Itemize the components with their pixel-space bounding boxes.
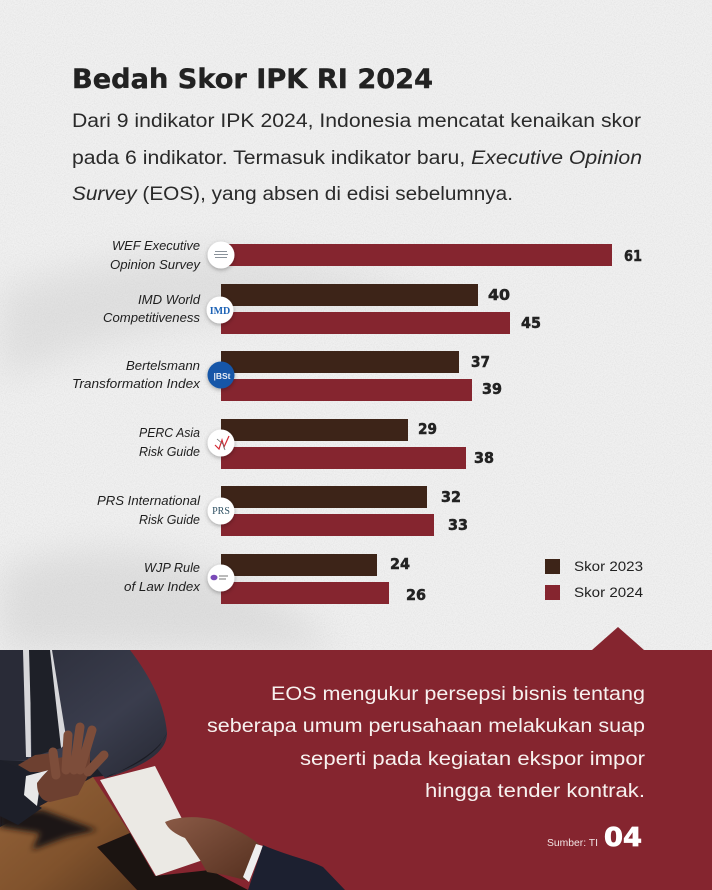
envelope (100, 766, 203, 876)
row: Bertelsmann Transformation Index: |BSt (213, 371, 231, 381)
row: PERC Asia Risk Guide: PERC Asia (139, 426, 200, 440)
legend: Skor 2024 (574, 584, 643, 600)
clasped hand (18, 753, 52, 772)
page number: 04 (604, 823, 642, 853)
callout text (207, 684, 646, 802)
row: Bertelsmann Transformation Index: Transformation Index (72, 377, 201, 391)
row: PRS International Risk Guide: PRS International (97, 494, 201, 508)
paper background (0, 0, 710, 650)
callout text: seperti pada kegiatan ekspor impor (300, 749, 646, 770)
row: WJP Rule of Law Index (124, 554, 426, 604)
row: WJP Rule of Law Index: of Law Index (124, 580, 201, 594)
lower sleeve (0, 760, 42, 825)
table shadows (0, 810, 97, 850)
lapel shadow (0, 650, 28, 760)
row: IMD World Competitiveness: 40 (488, 286, 510, 304)
row: WEF Executive Opinion Survey: Opinion Survey (110, 258, 201, 272)
row: IMD World Competitiveness (103, 284, 541, 334)
row: Bertelsmann Transformation Index: 37 (471, 353, 490, 371)
row: WJP Rule of Law Index: 24 (390, 555, 410, 573)
right suit (248, 845, 345, 890)
row: PERC Asia Risk Guide (139, 419, 494, 469)
row: Bertelsmann Transformation Index: 39 (482, 380, 502, 398)
row: WEF Executive Opinion Survey: 61 (624, 247, 642, 265)
arm shadow (105, 733, 167, 778)
red banner (0, 627, 712, 890)
intro text: Survey (EOS), yang absen di edisi sebelumnya. (72, 184, 513, 205)
row: WJP Rule of Law Index: WJP Rule (144, 561, 200, 575)
row: PRS International Risk Guide: PRS (212, 506, 230, 517)
intro text: Dari 9 indikator IPK 2024, Indonesia mencatat kenaikan skor (72, 111, 642, 132)
right cuff (243, 844, 263, 882)
row: PERC Asia Risk Guide: Risk Guide (139, 445, 200, 459)
row: PERC Asia Risk Guide: 38 (474, 449, 494, 467)
row: Bertelsmann Transformation Index (72, 351, 502, 401)
bar chart (72, 239, 642, 604)
offering hand (165, 817, 260, 880)
row: Bertelsmann Transformation Index: Bertelsmann (126, 359, 200, 373)
intro text: pada 6 indikator. Termasuk indikator baru, Executive Opinion (72, 148, 642, 169)
row: WEF Executive Opinion Survey: WEF Executive (112, 239, 200, 253)
row: PRS International Risk Guide: Risk Guide (139, 513, 200, 527)
row: IMD World Competitiveness: IMD (210, 306, 230, 317)
callout text: hingga tender kontrak. (425, 781, 645, 802)
callout text: EOS mengukur persepsi bisnis tentang (271, 684, 645, 705)
row: WEF Executive Opinion Survey (110, 239, 642, 272)
legend: Skor 2023 (574, 558, 643, 574)
row: WJP Rule of Law Index: 26 (406, 586, 426, 604)
photo: bribe refused (0, 650, 345, 890)
row: PRS International Risk Guide (97, 486, 468, 536)
shirt cuff (24, 770, 49, 806)
row: PRS International Risk Guide: 32 (441, 488, 461, 506)
row: IMD World Competitiveness: 45 (521, 314, 541, 332)
title: Bedah Skor IPK RI 2024 (72, 64, 433, 95)
row: IMD World Competitiveness: Competitiveness (103, 311, 200, 325)
intro text (72, 111, 642, 205)
dark backdrop (0, 650, 167, 830)
raised hand (37, 727, 104, 802)
row: PRS International Risk Guide: 33 (448, 516, 468, 534)
legend (545, 558, 643, 600)
businessman suit (0, 650, 167, 778)
shirt and tie (23, 650, 31, 757)
row: PERC Asia Risk Guide: 29 (418, 420, 437, 438)
source: Sumber: TI (547, 838, 598, 849)
row: IMD World Competitiveness: IMD World (138, 293, 201, 307)
callout text: seberapa umum perusahaan melakukan suap (207, 716, 645, 737)
table wood (0, 777, 137, 890)
